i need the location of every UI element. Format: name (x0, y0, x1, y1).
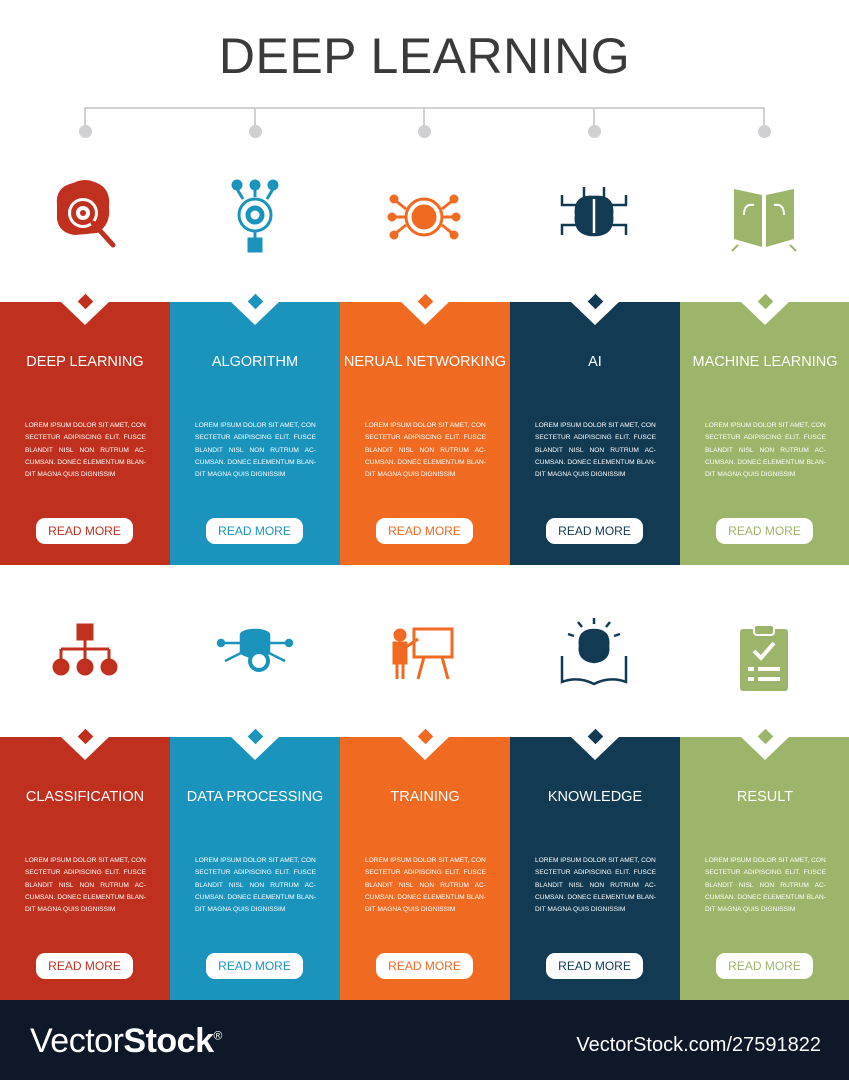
panel: data processing: CUMSAN. DONEC ELEMENTUM BLAN- (195, 894, 316, 901)
panel: neural networking (340, 302, 510, 565)
panel: classification: DIT MAGNA QUIS DIGNISSIM (25, 906, 115, 913)
panel: training: TRAINING (390, 789, 460, 805)
panel: data processing (170, 737, 340, 1000)
panel: result: READ MORE (728, 959, 801, 973)
panel: neural networking: BLANDIT NISL NON RUTRUM AC- (365, 447, 486, 454)
panel: data processing: READ MORE (218, 959, 291, 973)
panel: knowledge: DIT MAGNA QUIS DIGNISSIM (535, 906, 625, 913)
panel: training: DIT MAGNA QUIS DIGNISSIM (365, 906, 455, 913)
footer id: VectorStock.com/27591822 (576, 1034, 821, 1056)
panel: deep learning: DIT MAGNA QUIS DIGNISSIM (25, 471, 115, 478)
panel: machine learning: CUMSAN. DONEC ELEMENTUM BLAN- (705, 459, 826, 466)
panel: knowledge: LOREM IPSUM DOLOR SIT AMET, CON- (535, 857, 656, 864)
panel: result: DIT MAGNA QUIS DIGNISSIM (705, 906, 795, 913)
panel: training: SECTETUR ADIPISCING ELIT. FUSCE (365, 869, 486, 876)
panel: neural networking: SECTETUR ADIPISCING ELIT. FUSCE (365, 434, 486, 441)
panel: deep learning: CUMSAN. DONEC ELEMENTUM BLAN- (25, 459, 146, 466)
panel: data processing: BLANDIT NISL NON RUTRUM AC- (195, 882, 316, 889)
panel: ai: LOREM IPSUM DOLOR SIT AMET, CON- (535, 422, 656, 429)
footer bar (0, 1000, 849, 1080)
panel: result (680, 737, 849, 1000)
panel: classification: BLANDIT NISL NON RUTRUM AC- (25, 882, 146, 889)
footer logo: VectorStock® (30, 1022, 222, 1060)
panel: ai (510, 302, 680, 565)
icon: brain magnifier (56, 180, 116, 248)
panel: machine learning: MACHINE LEARNING (692, 354, 838, 370)
icon: neural networking (388, 194, 460, 240)
panel: deep learning: READ MORE (48, 524, 121, 538)
icon: classification (52, 624, 118, 676)
panel: deep learning: DEEP LEARNING (26, 354, 144, 370)
panel: classification: LOREM IPSUM DOLOR SIT AMET, CON- (25, 857, 146, 864)
panel: knowledge (510, 737, 680, 1000)
panel: classification: READ MORE (48, 959, 121, 973)
panel: training: READ MORE (388, 959, 461, 973)
panel: knowledge: KNOWLEDGE (548, 789, 642, 805)
panel: algorithm: CUMSAN. DONEC ELEMENTUM BLAN- (195, 459, 316, 466)
panel: result: LOREM IPSUM DOLOR SIT AMET, CON- (705, 857, 826, 864)
icon: knowledge (560, 618, 628, 686)
icon: result clipboard (740, 626, 788, 691)
panel: ai: AI (588, 354, 602, 370)
panel: knowledge: SECTETUR ADIPISCING ELIT. FUSCE (535, 869, 656, 876)
panel: machine learning: LOREM IPSUM DOLOR SIT AMET, CON- (705, 422, 826, 429)
panel: deep learning: SECTETUR ADIPISCING ELIT. FUSCE (25, 434, 146, 441)
panel: data processing: DIT MAGNA QUIS DIGNISSIM (195, 906, 285, 913)
panel: training: CUMSAN. DONEC ELEMENTUM BLAN- (365, 894, 486, 901)
panel: neural networking: NERUAL NETWORKING (344, 354, 506, 370)
panel: machine learning: SECTETUR ADIPISCING ELIT. FUSCE (705, 434, 826, 441)
panel: machine learning: READ MORE (728, 524, 801, 538)
panel: ai: CUMSAN. DONEC ELEMENTUM BLAN- (535, 459, 656, 466)
panel: result: BLANDIT NISL NON RUTRUM AC- (705, 882, 826, 889)
panel: ai: BLANDIT NISL NON RUTRUM AC- (535, 447, 656, 454)
panel: knowledge: CUMSAN. DONEC ELEMENTUM BLAN- (535, 894, 656, 901)
panel: result: SECTETUR ADIPISCING ELIT. FUSCE (705, 869, 826, 876)
icon: machine learning book (731, 189, 797, 252)
icon: training (392, 628, 454, 680)
panel: result: CUMSAN. DONEC ELEMENTUM BLAN- (705, 894, 826, 901)
panel: algorithm: BLANDIT NISL NON RUTRUM AC- (195, 447, 316, 454)
panel: knowledge: BLANDIT NISL NON RUTRUM AC- (535, 882, 656, 889)
title: DEEP LEARNING (219, 28, 630, 84)
panel: training (340, 737, 510, 1000)
panel: training: LOREM IPSUM DOLOR SIT AMET, CON- (365, 857, 486, 864)
panel: neural networking: CUMSAN. DONEC ELEMENTUM BLAN- (365, 459, 486, 466)
panel: data processing: SECTETUR ADIPISCING ELIT. FUSCE (195, 869, 316, 876)
panel: result: RESULT (737, 789, 793, 805)
panel: machine learning (680, 302, 849, 565)
panel: ai: DIT MAGNA QUIS DIGNISSIM (535, 471, 625, 478)
panel: training: BLANDIT NISL NON RUTRUM AC- (365, 882, 486, 889)
panel: machine learning: DIT MAGNA QUIS DIGNISSIM (705, 471, 795, 478)
panel: ai: READ MORE (558, 524, 631, 538)
panel: knowledge: READ MORE (558, 959, 631, 973)
panel: ai: SECTETUR ADIPISCING ELIT. FUSCE (535, 434, 656, 441)
panel: algorithm: READ MORE (218, 524, 291, 538)
panel: algorithm: ALGORITHM (212, 354, 298, 370)
panel: neural networking: READ MORE (388, 524, 461, 538)
panel: classification: CUMSAN. DONEC ELEMENTUM BLAN- (25, 894, 146, 901)
panel: algorithm (170, 302, 340, 565)
panel: deep learning (0, 302, 170, 565)
panel: neural networking: LOREM IPSUM DOLOR SIT AMET, CON- (365, 422, 486, 429)
panel: classification: SECTETUR ADIPISCING ELIT. FUSCE (25, 869, 146, 876)
panel: machine learning: BLANDIT NISL NON RUTRUM AC- (705, 447, 826, 454)
panel: classification (0, 737, 170, 1000)
panel: neural networking: DIT MAGNA QUIS DIGNISSIM (365, 471, 455, 478)
panel: data processing: LOREM IPSUM DOLOR SIT AMET, CON- (195, 857, 316, 864)
icon: ai brain (560, 187, 628, 236)
icon: data processing (216, 628, 294, 672)
panel: data processing: DATA PROCESSING (187, 789, 323, 805)
panel: algorithm: SECTETUR ADIPISCING ELIT. FUSCE (195, 434, 316, 441)
panel: classification: CLASSIFICATION (26, 789, 144, 805)
icon: algorithm (232, 180, 278, 252)
panel: algorithm: DIT MAGNA QUIS DIGNISSIM (195, 471, 285, 478)
connector lines (84, 107, 765, 109)
panel: deep learning: LOREM IPSUM DOLOR SIT AMET, CON- (25, 422, 146, 429)
panel: deep learning: BLANDIT NISL NON RUTRUM AC- (25, 447, 146, 454)
panel: algorithm: LOREM IPSUM DOLOR SIT AMET, CON- (195, 422, 316, 429)
